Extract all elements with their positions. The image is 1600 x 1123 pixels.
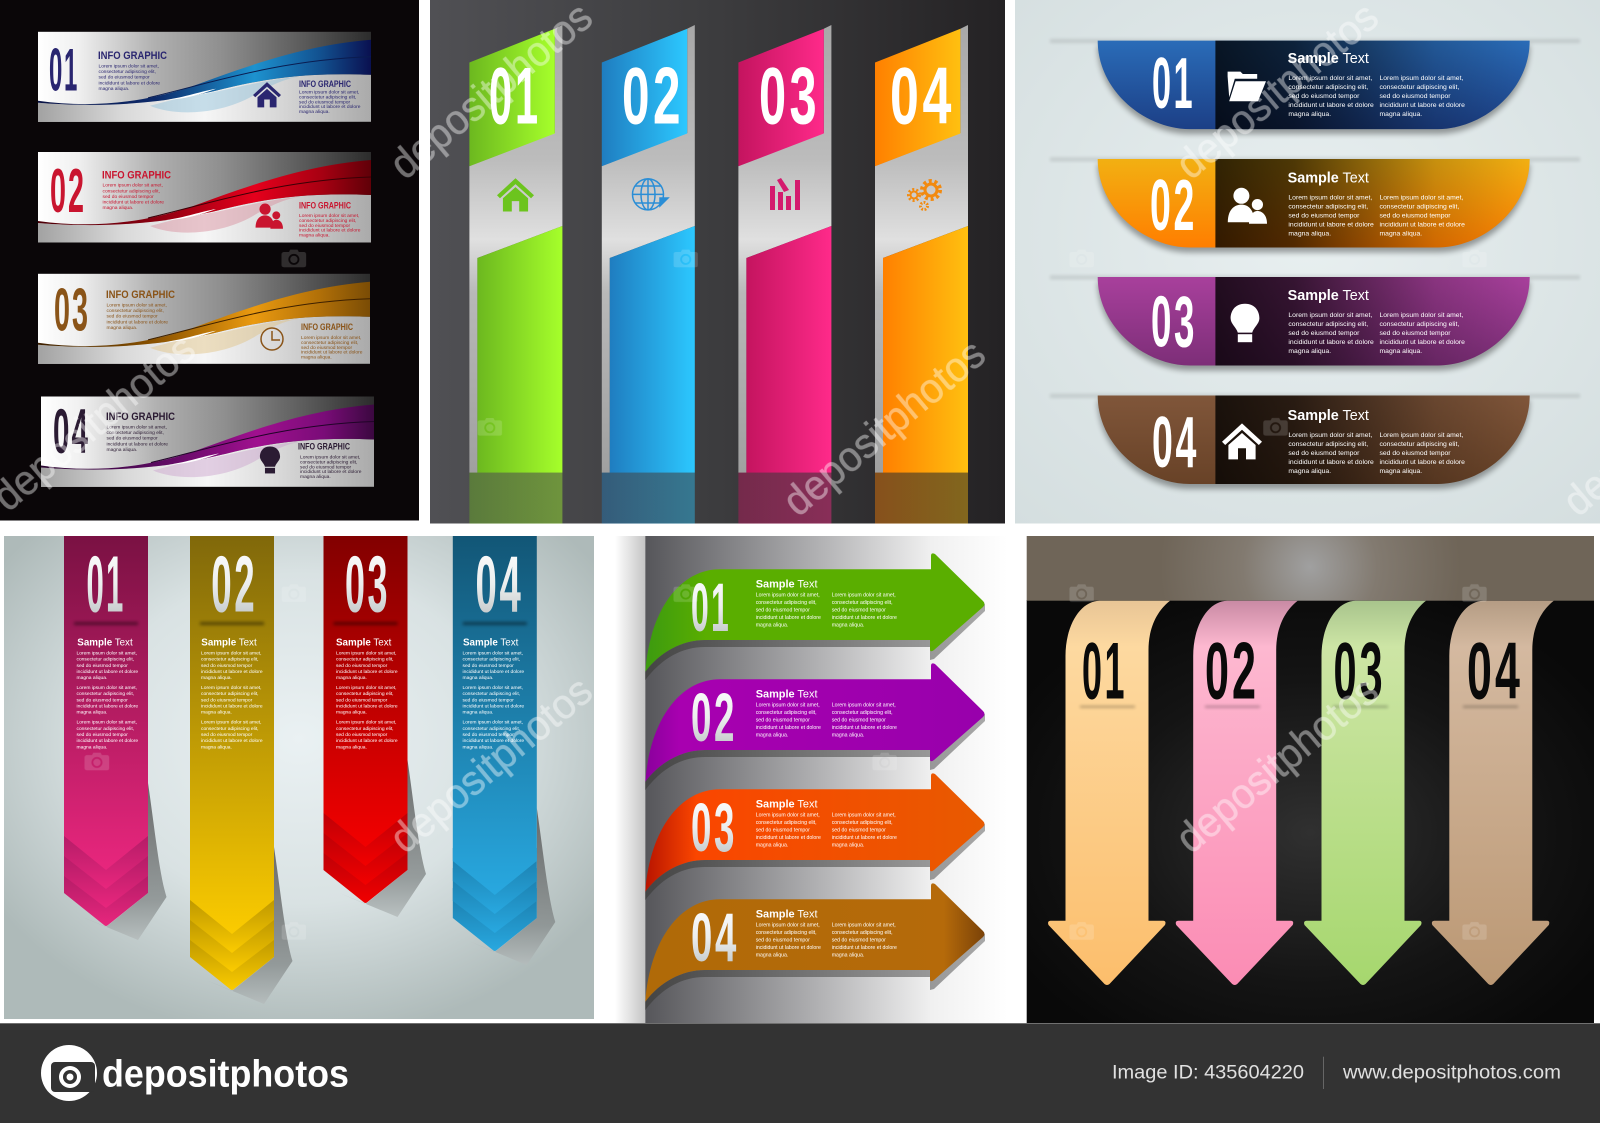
number 04: 04 — [890, 51, 955, 141]
text column 2: consectetur adipiscing elit, — [832, 600, 893, 606]
heading: INFO GRAPHIC — [102, 170, 171, 182]
number 03: 03 — [691, 789, 737, 866]
panel: rounded tabs — [1015, 0, 1600, 524]
down arrow 04 — [1432, 601, 1554, 985]
text column 2: incididunt ut labore et dolore — [832, 725, 897, 731]
heading: Sample Text — [756, 578, 818, 590]
text block 1: sed do eiusmod tempor — [336, 663, 388, 669]
text column 2: magna aliqua. — [832, 732, 864, 738]
text column 1: consectetur adipiscing elit, — [756, 600, 817, 606]
text block right: Lorem ipsum dolor sit amet, — [299, 90, 359, 96]
text column 1: Lorem ipsum dolor sit amet, — [1288, 312, 1372, 319]
text block 3: consectetur adipiscing elit, — [201, 726, 259, 732]
text block 2: consectetur adipiscing elit, — [336, 691, 394, 697]
number 02: 02 — [691, 679, 737, 756]
number 03: 03 — [759, 51, 820, 141]
heading: Sample Text — [756, 798, 818, 810]
text column 2: Lorem ipsum dolor sit amet, — [1380, 194, 1463, 202]
column 04 — [875, 25, 968, 524]
text column 1: Lorem ipsum dolor sit amet, — [1288, 432, 1372, 439]
text column 2: incididunt ut labore et dolore — [832, 835, 897, 841]
panel: perspective columns — [430, 0, 1005, 524]
arrow 01: 01 — [691, 569, 731, 646]
text block 1: incididunt ut labore et dolore — [201, 669, 263, 675]
icon: house — [1222, 423, 1262, 459]
text block 1: consectetur adipiscing elit, — [76, 657, 134, 663]
text block right: sed do eiusmod tempor — [301, 345, 352, 351]
text block 1: Lorem ipsum dolor sit amet, — [201, 650, 262, 656]
text column 1: incididunt ut labore et dolore — [1288, 339, 1374, 346]
banner 04 — [41, 396, 374, 487]
text column 2: Lorem ipsum dolor sit amet, — [1380, 75, 1463, 82]
text column 1: incididunt ut labore et dolore — [1288, 102, 1374, 109]
text column 1: incididunt ut labore et dolore — [756, 615, 821, 621]
text block 3: sed do eiusmod tempor — [462, 732, 514, 738]
icon: clock — [261, 328, 283, 350]
ribbon 03: 03 — [345, 540, 390, 629]
heading: INFO GRAPHIC — [106, 289, 175, 301]
text column 1: sed do eiusmod tempor — [1288, 93, 1360, 100]
text block right: sed do eiusmod tempor — [300, 464, 351, 470]
text column 1: sed do eiusmod tempor — [1288, 330, 1360, 337]
text column 1: incididunt ut labore et dolore — [756, 835, 821, 841]
text column 1: consectetur adipiscing elit, — [1288, 321, 1368, 328]
icon: bar chart — [770, 178, 800, 210]
text column 2: sed do eiusmod tempor — [832, 717, 886, 723]
text block 2: magna aliqua. — [201, 710, 232, 716]
heading: Sample Text — [1288, 51, 1369, 67]
text block 1: Lorem ipsum dolor sit amet, — [76, 650, 137, 656]
text block right: incididunt ut labore et dolore — [300, 469, 362, 475]
text block 3: magna aliqua. — [201, 744, 232, 750]
image id: Image ID: 435604220 — [1112, 1063, 1304, 1084]
text block right: consectetur adipiscing elit, — [299, 218, 356, 224]
icon: logo camera — [41, 1045, 97, 1101]
text column 2: sed do eiusmod tempor — [832, 827, 886, 833]
text block right: Lorem ipsum dolor sit amet, — [299, 213, 359, 219]
text column 1: consectetur adipiscing elit, — [756, 710, 817, 716]
text block right: consectetur adipiscing elit, — [300, 459, 357, 465]
panel: side arrows — [615, 536, 1026, 1023]
text column 1: Lorem ipsum dolor sit amet, — [756, 592, 820, 598]
text column 2: incididunt ut labore et dolore — [1380, 222, 1465, 228]
text block right: sed do eiusmod tempor — [299, 99, 350, 105]
icon: people — [256, 204, 283, 229]
icon: folder — [1228, 72, 1266, 101]
column 03 — [738, 25, 831, 524]
text block 1: sed do eiusmod tempor — [462, 663, 514, 669]
text column 2: incididunt ut labore et dolore — [832, 615, 897, 621]
text block 2: incididunt ut labore et dolore — [336, 704, 398, 710]
panel: hanging ribbons — [4, 536, 594, 1019]
heading: Sample Text — [201, 638, 257, 649]
text column 2: sed do eiusmod tempor — [1380, 330, 1451, 337]
text column 1: consectetur adipiscing elit, — [756, 820, 817, 826]
icon: globe — [632, 179, 668, 210]
text block 3: magna aliqua. — [336, 744, 367, 750]
text block: incididunt ut labore et dolore — [98, 80, 160, 86]
text block right: Lorem ipsum dolor sit amet, — [300, 454, 360, 460]
icon: people — [1228, 188, 1267, 224]
text block 1: magna aliqua. — [336, 675, 367, 681]
text column 2: magna aliqua. — [832, 842, 864, 848]
panel: wave banners — [0, 0, 419, 520]
banner 01: 01 — [49, 37, 79, 104]
text block: sed do eiusmod tempor — [106, 314, 158, 320]
text column 1: sed do eiusmod tempor — [756, 937, 810, 943]
text column 1: magna aliqua. — [756, 952, 788, 958]
text block: magna aliqua. — [102, 205, 133, 211]
banner 03: 03 — [54, 277, 90, 344]
banner 02 — [38, 152, 371, 242]
text block 1: magna aliqua. — [76, 675, 107, 681]
text block right: incididunt ut labore et dolore — [299, 104, 361, 110]
text block right: incididunt ut labore et dolore — [301, 350, 363, 356]
tab 03 — [1050, 275, 1580, 370]
text block 2: consectetur adipiscing elit, — [201, 691, 259, 697]
banner 02: 02 — [50, 157, 86, 226]
text column 1: sed do eiusmod tempor — [756, 827, 810, 833]
watermark text: depositphotos — [381, 666, 601, 862]
text column 2: incididunt ut labore et dolore — [1380, 339, 1465, 346]
text block 3: sed do eiusmod tempor — [76, 732, 128, 738]
number 03: 03 — [1151, 282, 1197, 362]
text block: sed do eiusmod tempor — [106, 436, 158, 442]
text column 2: consectetur adipiscing elit, — [832, 930, 893, 936]
arrow 04 — [645, 883, 985, 1010]
down arrow 01: 01 — [1082, 626, 1127, 716]
banner 04: 04 — [53, 397, 90, 467]
text block 1: incididunt ut labore et dolore — [76, 669, 138, 675]
text block: Lorem ipsum dolor sit amet, — [98, 64, 159, 70]
text column 1: magna aliqua. — [1288, 111, 1331, 118]
text block 1: incididunt ut labore et dolore — [462, 669, 524, 675]
tab 04 — [1050, 394, 1580, 489]
text column 2: consectetur adipiscing elit, — [1380, 84, 1459, 91]
text block: consectetur adipiscing elit, — [102, 188, 160, 194]
text column 1: sed do eiusmod tempor — [1288, 450, 1360, 457]
column 02 — [602, 25, 695, 524]
heading: Sample Text — [756, 908, 818, 920]
text column 2: sed do eiusmod tempor — [1380, 93, 1451, 100]
icon: house — [497, 178, 534, 212]
column 01 — [469, 25, 562, 524]
text block 2: consectetur adipiscing elit, — [76, 691, 134, 697]
text column 1: Lorem ipsum dolor sit amet, — [1288, 194, 1372, 202]
text block: incididunt ut labore et dolore — [102, 199, 164, 205]
text block: consectetur adipiscing elit, — [106, 430, 164, 436]
text block 1: Lorem ipsum dolor sit amet, — [336, 650, 397, 656]
text block 3: consectetur adipiscing elit, — [462, 726, 520, 732]
text column 2: Lorem ipsum dolor sit amet, — [1380, 312, 1463, 319]
number 04: 04 — [1152, 403, 1199, 483]
text column 1: consectetur adipiscing elit, — [1288, 441, 1368, 448]
text block 2: Lorem ipsum dolor sit amet, — [336, 685, 397, 691]
ribbon 02 — [190, 536, 292, 1004]
tab 02 — [1050, 157, 1580, 252]
heading: Sample Text — [756, 688, 818, 700]
text block right: Lorem ipsum dolor sit amet, — [301, 335, 361, 341]
text column 1: incididunt ut labore et dolore — [1288, 459, 1374, 466]
text column 1: magna aliqua. — [1288, 468, 1331, 475]
watermark text: depositphotos — [774, 329, 994, 525]
heading: Sample Text — [77, 638, 133, 649]
heading: Sample Text — [1288, 170, 1369, 186]
icon: gears — [908, 181, 940, 210]
text block 1: incididunt ut labore et dolore — [336, 669, 398, 675]
text block 2: incididunt ut labore et dolore — [462, 704, 524, 710]
tab 01 — [1050, 39, 1580, 134]
text block 1: magna aliqua. — [201, 675, 232, 681]
text column 2: consectetur adipiscing elit, — [1380, 321, 1459, 328]
text block 3: magna aliqua. — [76, 744, 107, 750]
text column 2: magna aliqua. — [1380, 468, 1422, 475]
logo wordmark: depositphotos — [102, 1054, 349, 1096]
down arrow 01 — [1048, 601, 1170, 985]
number 03: 03 — [1334, 626, 1386, 716]
text block 2: magna aliqua. — [76, 710, 107, 716]
heading: INFO GRAPHIC — [98, 50, 167, 62]
watermark text — [0, 0, 1600, 862]
text block: magna aliqua. — [106, 447, 137, 453]
text column 1: Lorem ipsum dolor sit amet, — [756, 812, 820, 818]
text block 2: incididunt ut labore et dolore — [201, 704, 263, 710]
heading: Sample Text — [463, 638, 519, 649]
text block 1: consectetur adipiscing elit, — [462, 657, 520, 663]
heading right: INFO GRAPHIC — [301, 322, 353, 332]
text block: Lorem ipsum dolor sit amet, — [106, 424, 167, 430]
text column 2: consectetur adipiscing elit, — [832, 710, 893, 716]
text block 2: Lorem ipsum dolor sit amet, — [462, 685, 523, 691]
text column 1: sed do eiusmod tempor — [756, 607, 810, 613]
text block 1: Lorem ipsum dolor sit amet, — [462, 650, 523, 656]
watermark text: depositphotos — [1167, 666, 1387, 862]
text column 1: sed do eiusmod tempor — [756, 717, 810, 723]
text block: consectetur adipiscing elit, — [106, 308, 164, 314]
text block 3: consectetur adipiscing elit, — [336, 726, 394, 732]
ribbon 01: 01 — [86, 540, 126, 629]
text column 2: magna aliqua. — [832, 622, 864, 628]
text column 2: Lorem ipsum dolor sit amet, — [832, 812, 896, 818]
down arrow 02 — [1176, 601, 1298, 985]
text column 2: Lorem ipsum dolor sit amet, — [832, 592, 896, 598]
heading right: INFO GRAPHIC — [298, 442, 350, 452]
text column 1: incididunt ut labore et dolore — [1288, 222, 1374, 228]
text column 1: consectetur adipiscing elit, — [1288, 84, 1368, 91]
text column 2: Lorem ipsum dolor sit amet, — [832, 922, 896, 928]
heading: Sample Text — [1288, 288, 1369, 304]
arrow 01 — [645, 553, 985, 680]
ribbon 02: 02 — [211, 540, 257, 629]
text column 2: consectetur adipiscing elit, — [1380, 441, 1459, 448]
text block 1: consectetur adipiscing elit, — [336, 657, 394, 663]
text block: consectetur adipiscing elit, — [98, 69, 156, 75]
number 01: 01 — [489, 51, 541, 141]
text block 2: sed do eiusmod tempor — [201, 697, 253, 703]
text block right: consectetur adipiscing elit, — [299, 94, 356, 100]
heading: Sample Text — [1288, 408, 1369, 424]
text block right: sed do eiusmod tempor — [299, 223, 350, 229]
text column 1: Lorem ipsum dolor sit amet, — [756, 702, 820, 708]
number 04: 04 — [1467, 626, 1523, 716]
ribbon 03 — [324, 536, 426, 917]
text block 3: consectetur adipiscing elit, — [76, 726, 134, 732]
text block: incididunt ut labore et dolore — [106, 441, 168, 447]
banner 03 — [38, 274, 370, 364]
text column 1: incididunt ut labore et dolore — [756, 725, 821, 731]
text column 1: Lorem ipsum dolor sit amet, — [756, 922, 820, 928]
icon: bulb — [1231, 304, 1259, 342]
text block 3: Lorem ipsum dolor sit amet, — [336, 720, 397, 726]
ribbon 01 — [64, 536, 166, 940]
text column 2: magna aliqua. — [1380, 348, 1422, 355]
text block 2: magna aliqua. — [462, 710, 493, 716]
text column 2: magna aliqua. — [832, 952, 864, 958]
text block 1: magna aliqua. — [462, 675, 493, 681]
text block: magna aliqua. — [98, 86, 129, 92]
icon: house — [253, 82, 281, 107]
tab 01: 01 — [1152, 44, 1195, 124]
text block right: magna aliqua. — [301, 355, 332, 361]
text block: magna aliqua. — [106, 325, 137, 331]
heading right: INFO GRAPHIC — [299, 201, 351, 211]
text block right: incididunt ut labore et dolore — [299, 228, 361, 234]
text block 2: Lorem ipsum dolor sit amet, — [201, 685, 262, 691]
text column 2: sed do eiusmod tempor — [832, 937, 886, 943]
text block 1: sed do eiusmod tempor — [201, 663, 253, 669]
text block right: magna aliqua. — [299, 109, 330, 115]
text column 2: sed do eiusmod tempor — [1380, 450, 1451, 457]
text block 3: incididunt ut labore et dolore — [462, 738, 524, 744]
text block: incididunt ut labore et dolore — [106, 319, 168, 325]
text block: Lorem ipsum dolor sit amet, — [106, 302, 167, 308]
panel: down arrows — [1027, 536, 1594, 1023]
text column 2: incididunt ut labore et dolore — [1380, 102, 1465, 109]
down arrow 03 — [1304, 601, 1426, 985]
text block 3: sed do eiusmod tempor — [336, 732, 388, 738]
heading right: INFO GRAPHIC — [299, 79, 351, 89]
text block 2: incididunt ut labore et dolore — [76, 704, 138, 710]
text column 1: magna aliqua. — [756, 842, 788, 848]
text block 2: Lorem ipsum dolor sit amet, — [76, 685, 137, 691]
text block: Lorem ipsum dolor sit amet, — [102, 183, 163, 189]
text column 2: consectetur adipiscing elit, — [832, 820, 893, 826]
text block 3: incididunt ut labore et dolore — [201, 738, 263, 744]
text block 3: magna aliqua. — [462, 744, 493, 750]
text block 2: sed do eiusmod tempor — [76, 697, 128, 703]
text column 2: consectetur adipiscing elit, — [1380, 204, 1459, 210]
text block 2: sed do eiusmod tempor — [462, 697, 514, 703]
text column 1: incididunt ut labore et dolore — [756, 945, 821, 951]
heading: INFO GRAPHIC — [106, 411, 175, 423]
arrow 02 — [645, 663, 985, 790]
text column 2: sed do eiusmod tempor — [832, 607, 886, 613]
text column 2: incididunt ut labore et dolore — [1380, 459, 1465, 466]
banner 01 — [38, 32, 371, 122]
text block: sed do eiusmod tempor — [98, 75, 150, 81]
text column 2: Lorem ipsum dolor sit amet, — [1380, 432, 1463, 439]
text block 2: magna aliqua. — [336, 710, 367, 716]
text block 3: Lorem ipsum dolor sit amet, — [201, 720, 262, 726]
text block 3: sed do eiusmod tempor — [201, 732, 253, 738]
text column 2: incididunt ut labore et dolore — [832, 945, 897, 951]
footer bar — [0, 1023, 1600, 1123]
text block 3: incididunt ut labore et dolore — [76, 738, 138, 744]
text column 1: Lorem ipsum dolor sit amet, — [1288, 75, 1372, 82]
text column 1: consectetur adipiscing elit, — [756, 930, 817, 936]
icon: bulb — [260, 447, 280, 473]
text block 3: Lorem ipsum dolor sit amet, — [462, 720, 523, 726]
text block 2: consectetur adipiscing elit, — [462, 691, 520, 697]
text column 1: magna aliqua. — [1288, 348, 1331, 355]
text block: sed do eiusmod tempor — [102, 194, 154, 200]
text block 3: Lorem ipsum dolor sit amet, — [76, 720, 137, 726]
text block 1: sed do eiusmod tempor — [76, 663, 128, 669]
text column 2: magna aliqua. — [1380, 230, 1422, 238]
arrow 03 — [645, 773, 985, 900]
heading: Sample Text — [336, 638, 392, 649]
text column 1: sed do eiusmod tempor — [1288, 212, 1360, 220]
text column 2: Lorem ipsum dolor sit amet, — [832, 702, 896, 708]
text column 1: magna aliqua. — [1288, 230, 1331, 238]
text block 2: sed do eiusmod tempor — [336, 697, 388, 703]
text column 1: consectetur adipiscing elit, — [1288, 204, 1368, 210]
text block 3: incididunt ut labore et dolore — [336, 738, 398, 744]
ribbon 04: 04 — [476, 540, 524, 629]
number 02: 02 — [1205, 626, 1259, 716]
text block right: consectetur adipiscing elit, — [301, 340, 358, 346]
watermark cameras — [85, 250, 1487, 940]
text block 1: consectetur adipiscing elit, — [201, 657, 259, 663]
website: www.depositphotos.com — [1342, 1063, 1561, 1084]
ribbon 04 — [453, 536, 555, 965]
number 04: 04 — [691, 899, 739, 976]
text column 2: sed do eiusmod tempor — [1380, 212, 1451, 220]
text block right: magna aliqua. — [300, 474, 331, 480]
text column 1: magna aliqua. — [756, 622, 788, 628]
text block right: magna aliqua. — [299, 233, 330, 239]
text column 1: magna aliqua. — [756, 732, 788, 738]
number 02: 02 — [622, 51, 684, 141]
number 02: 02 — [1150, 166, 1197, 246]
text column 2: magna aliqua. — [1380, 111, 1422, 118]
